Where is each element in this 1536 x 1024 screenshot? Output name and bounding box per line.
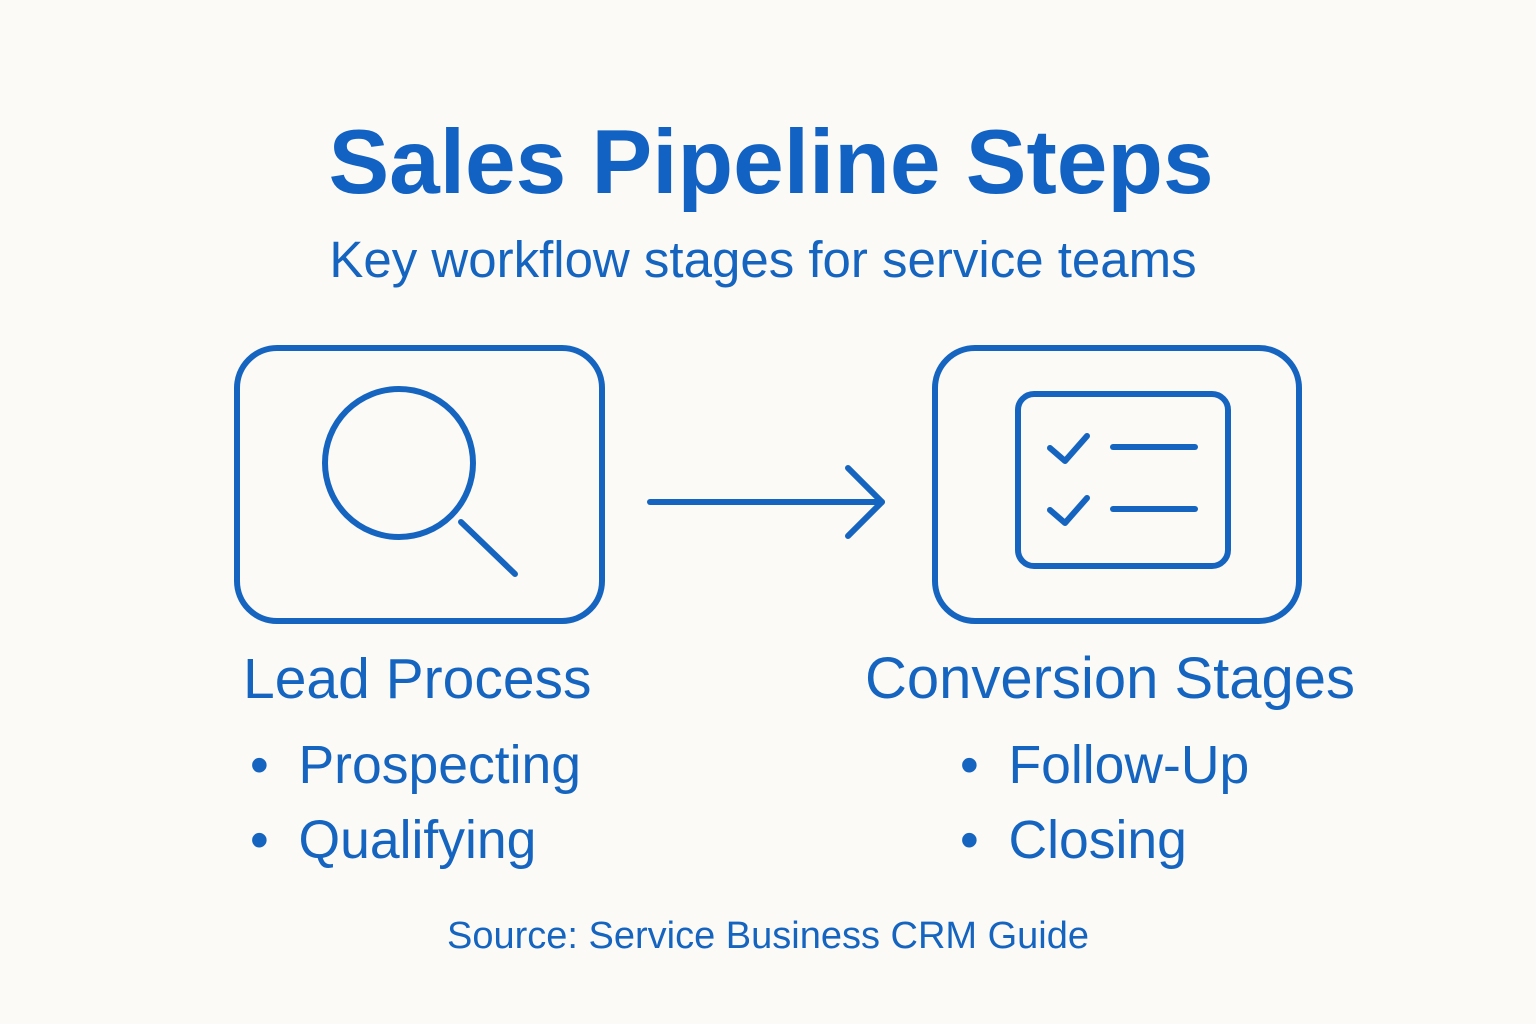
icon: magnifier	[237, 348, 602, 621]
list: conversion stages	[960, 736, 1249, 870]
heading: lead process: Lead Process	[243, 647, 592, 711]
list: lead process: • Qualifying	[250, 811, 536, 870]
source: Source: Service Business CRM Guide	[447, 915, 1089, 957]
list: lead process	[250, 736, 581, 870]
subtitle: Key workflow stages for service teams	[329, 231, 1197, 288]
icon: checklist	[935, 348, 1299, 621]
panel: conversion icon box	[932, 345, 1302, 624]
title: Sales Pipeline Steps	[328, 112, 1214, 213]
heading: conversion stages: Conversion Stages	[865, 646, 1355, 711]
list: lead process: • Prospecting	[250, 736, 581, 795]
arrow	[647, 465, 885, 539]
list: conversion stages: • Follow-Up	[960, 736, 1249, 795]
list: conversion stages: • Closing	[960, 811, 1187, 870]
